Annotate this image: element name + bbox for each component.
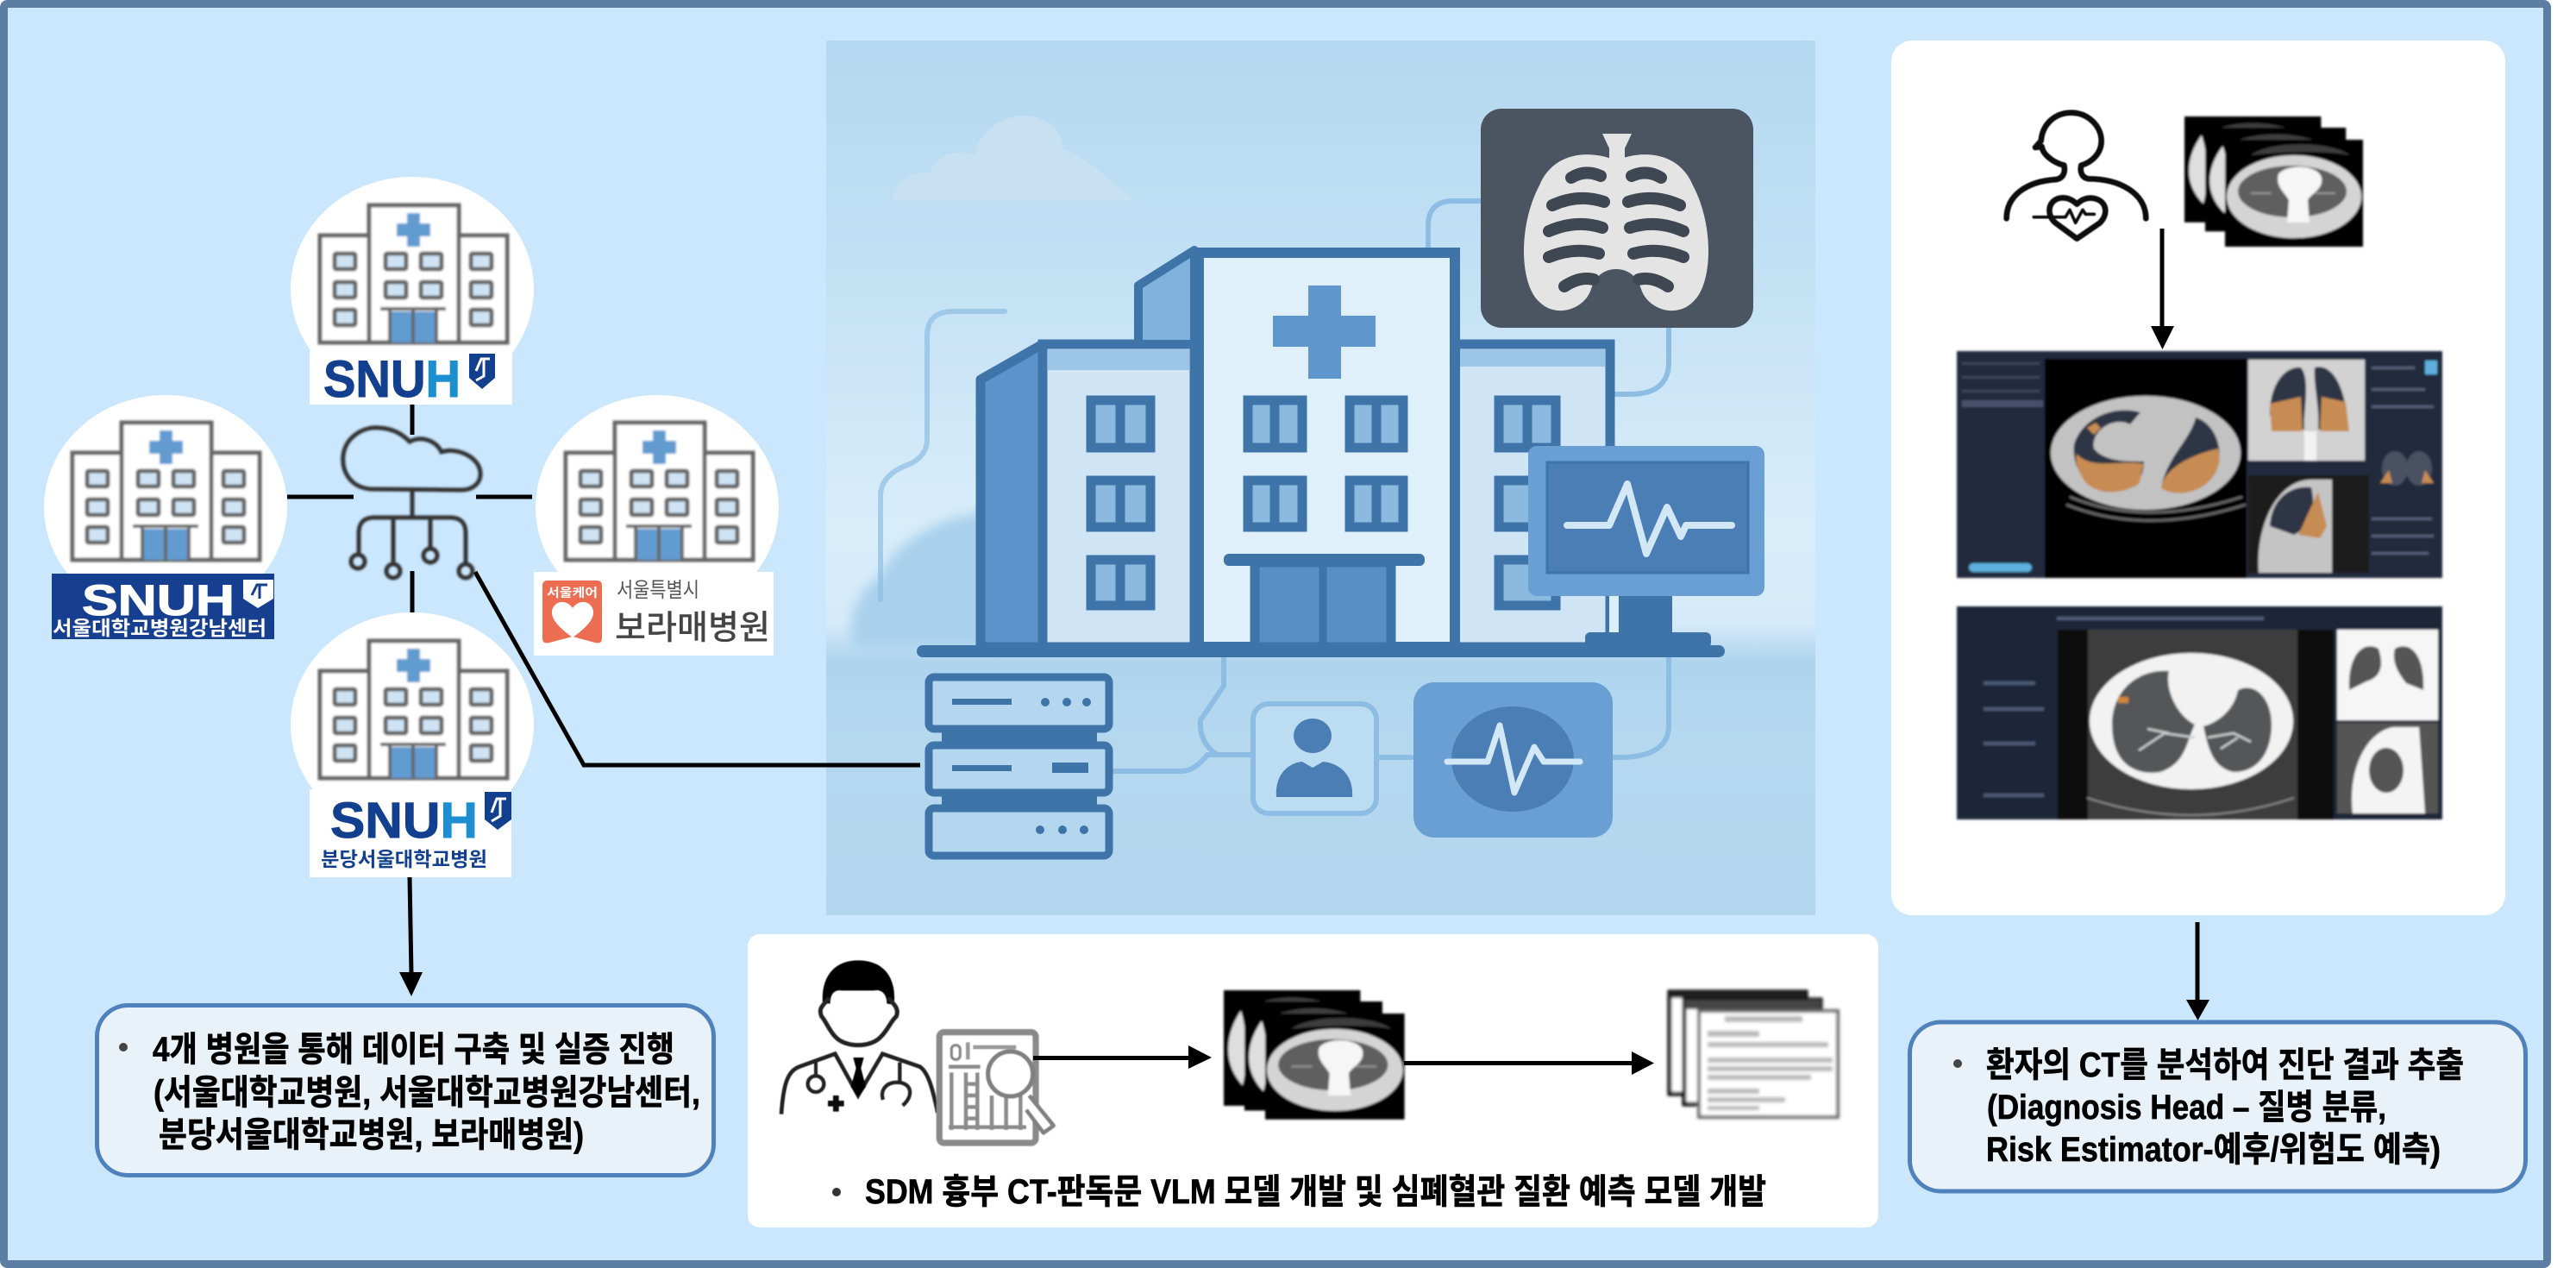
arrow: CT analysis to result [2186,922,2209,1020]
icon: patient with heart [2007,113,2146,239]
logo: Boramae: 서울특별시 [617,579,699,602]
icon: report with magnifier [939,1033,1054,1143]
windows [1091,400,1556,606]
logo: SNUH Gangnam [52,574,274,639]
connector: cloud to server [475,572,920,765]
text box: CT result extraction [1909,1022,2525,1191]
logo: SNUH Bundang [310,789,511,877]
text box: four hospital data: (서울대학교병원, 서울대학교병원강남센터, [154,1074,700,1112]
caption: SDM model development: SDM 흉부 CT-판독문 VLM 모델 개발 및 심폐혈관 질환 예측 모델 개발 [865,1173,1766,1211]
icon: monitor with pulse [1528,446,1764,648]
hospital node: SNUH [291,177,534,408]
text box: four hospital data: 분당서울대학교병원, 보라매병원) [159,1116,584,1154]
logo: Boramae [534,572,774,656]
text box: four hospital data: 4개 병원을 통해 데이터 구축 및 실증 진행 [153,1031,674,1069]
logo: SNUH: SNUH [323,350,461,408]
text box: CT result extraction: Risk Estimator-예후/위험도 예측) [1986,1131,2441,1169]
arrow: CT to report documents [1404,1051,1654,1075]
panel: report model development [748,934,1878,1227]
logo: SNUH [310,350,512,408]
logo: Boramae: 서울케어 [547,586,598,599]
CT viewer screenshot: diseased lungs [1957,351,2442,578]
panel: hospital data illustration [826,41,1815,915]
icon: background cloud [893,116,1135,201]
logo: SNUH Bundang: 분당서울대학교병원 [321,848,487,870]
icon: medical cross [1273,286,1376,379]
icon: chest x-ray [1481,109,1753,328]
logo: SNUH Gangnam: 서울대학교병원강남센터 [53,617,266,639]
logo: SNUH Gangnam: SNUH [82,576,235,625]
icon: report document stack [1670,992,1838,1117]
icon: server rack [929,677,1109,856]
icon: hospital building [981,250,1610,647]
connector lines [881,201,1669,771]
icon: doctor [781,960,937,1114]
icon: person box [1253,704,1376,813]
connectors: cloud to hospitals [287,405,532,612]
arrow: hospitals to data text [399,877,423,996]
text box: four hospital data [97,1006,714,1175]
icon: pulse box [1413,682,1613,838]
arrow: to CT viewer [2151,229,2174,349]
text box: CT result extraction: 환자의 CT를 분석하여 진단 결과 추출 [1986,1046,2464,1084]
hospital node: SNU Bundang [291,612,534,877]
arrow: report to CT [1033,1045,1212,1069]
icon: CT slice stack [2184,116,2363,247]
icon: cloud network [343,428,480,578]
soft ground cloud [851,509,992,647]
ground line [917,645,1725,657]
panel: CT analysis [1891,41,2505,915]
hospital node: Boramae [534,395,779,656]
logo: Boramae: 보라매병원 [615,610,770,647]
logo: SNUH Bundang: SNUH [330,793,478,849]
entrance door [1255,562,1391,647]
icon: CT slice stack [1224,990,1405,1120]
text box: CT result extraction: (Diagnosis Head – 질병 분류, [1987,1089,2386,1127]
hospital node: SNUH Gangnam Center [44,395,287,639]
CT viewer screenshot: normal lungs [1957,606,2442,819]
